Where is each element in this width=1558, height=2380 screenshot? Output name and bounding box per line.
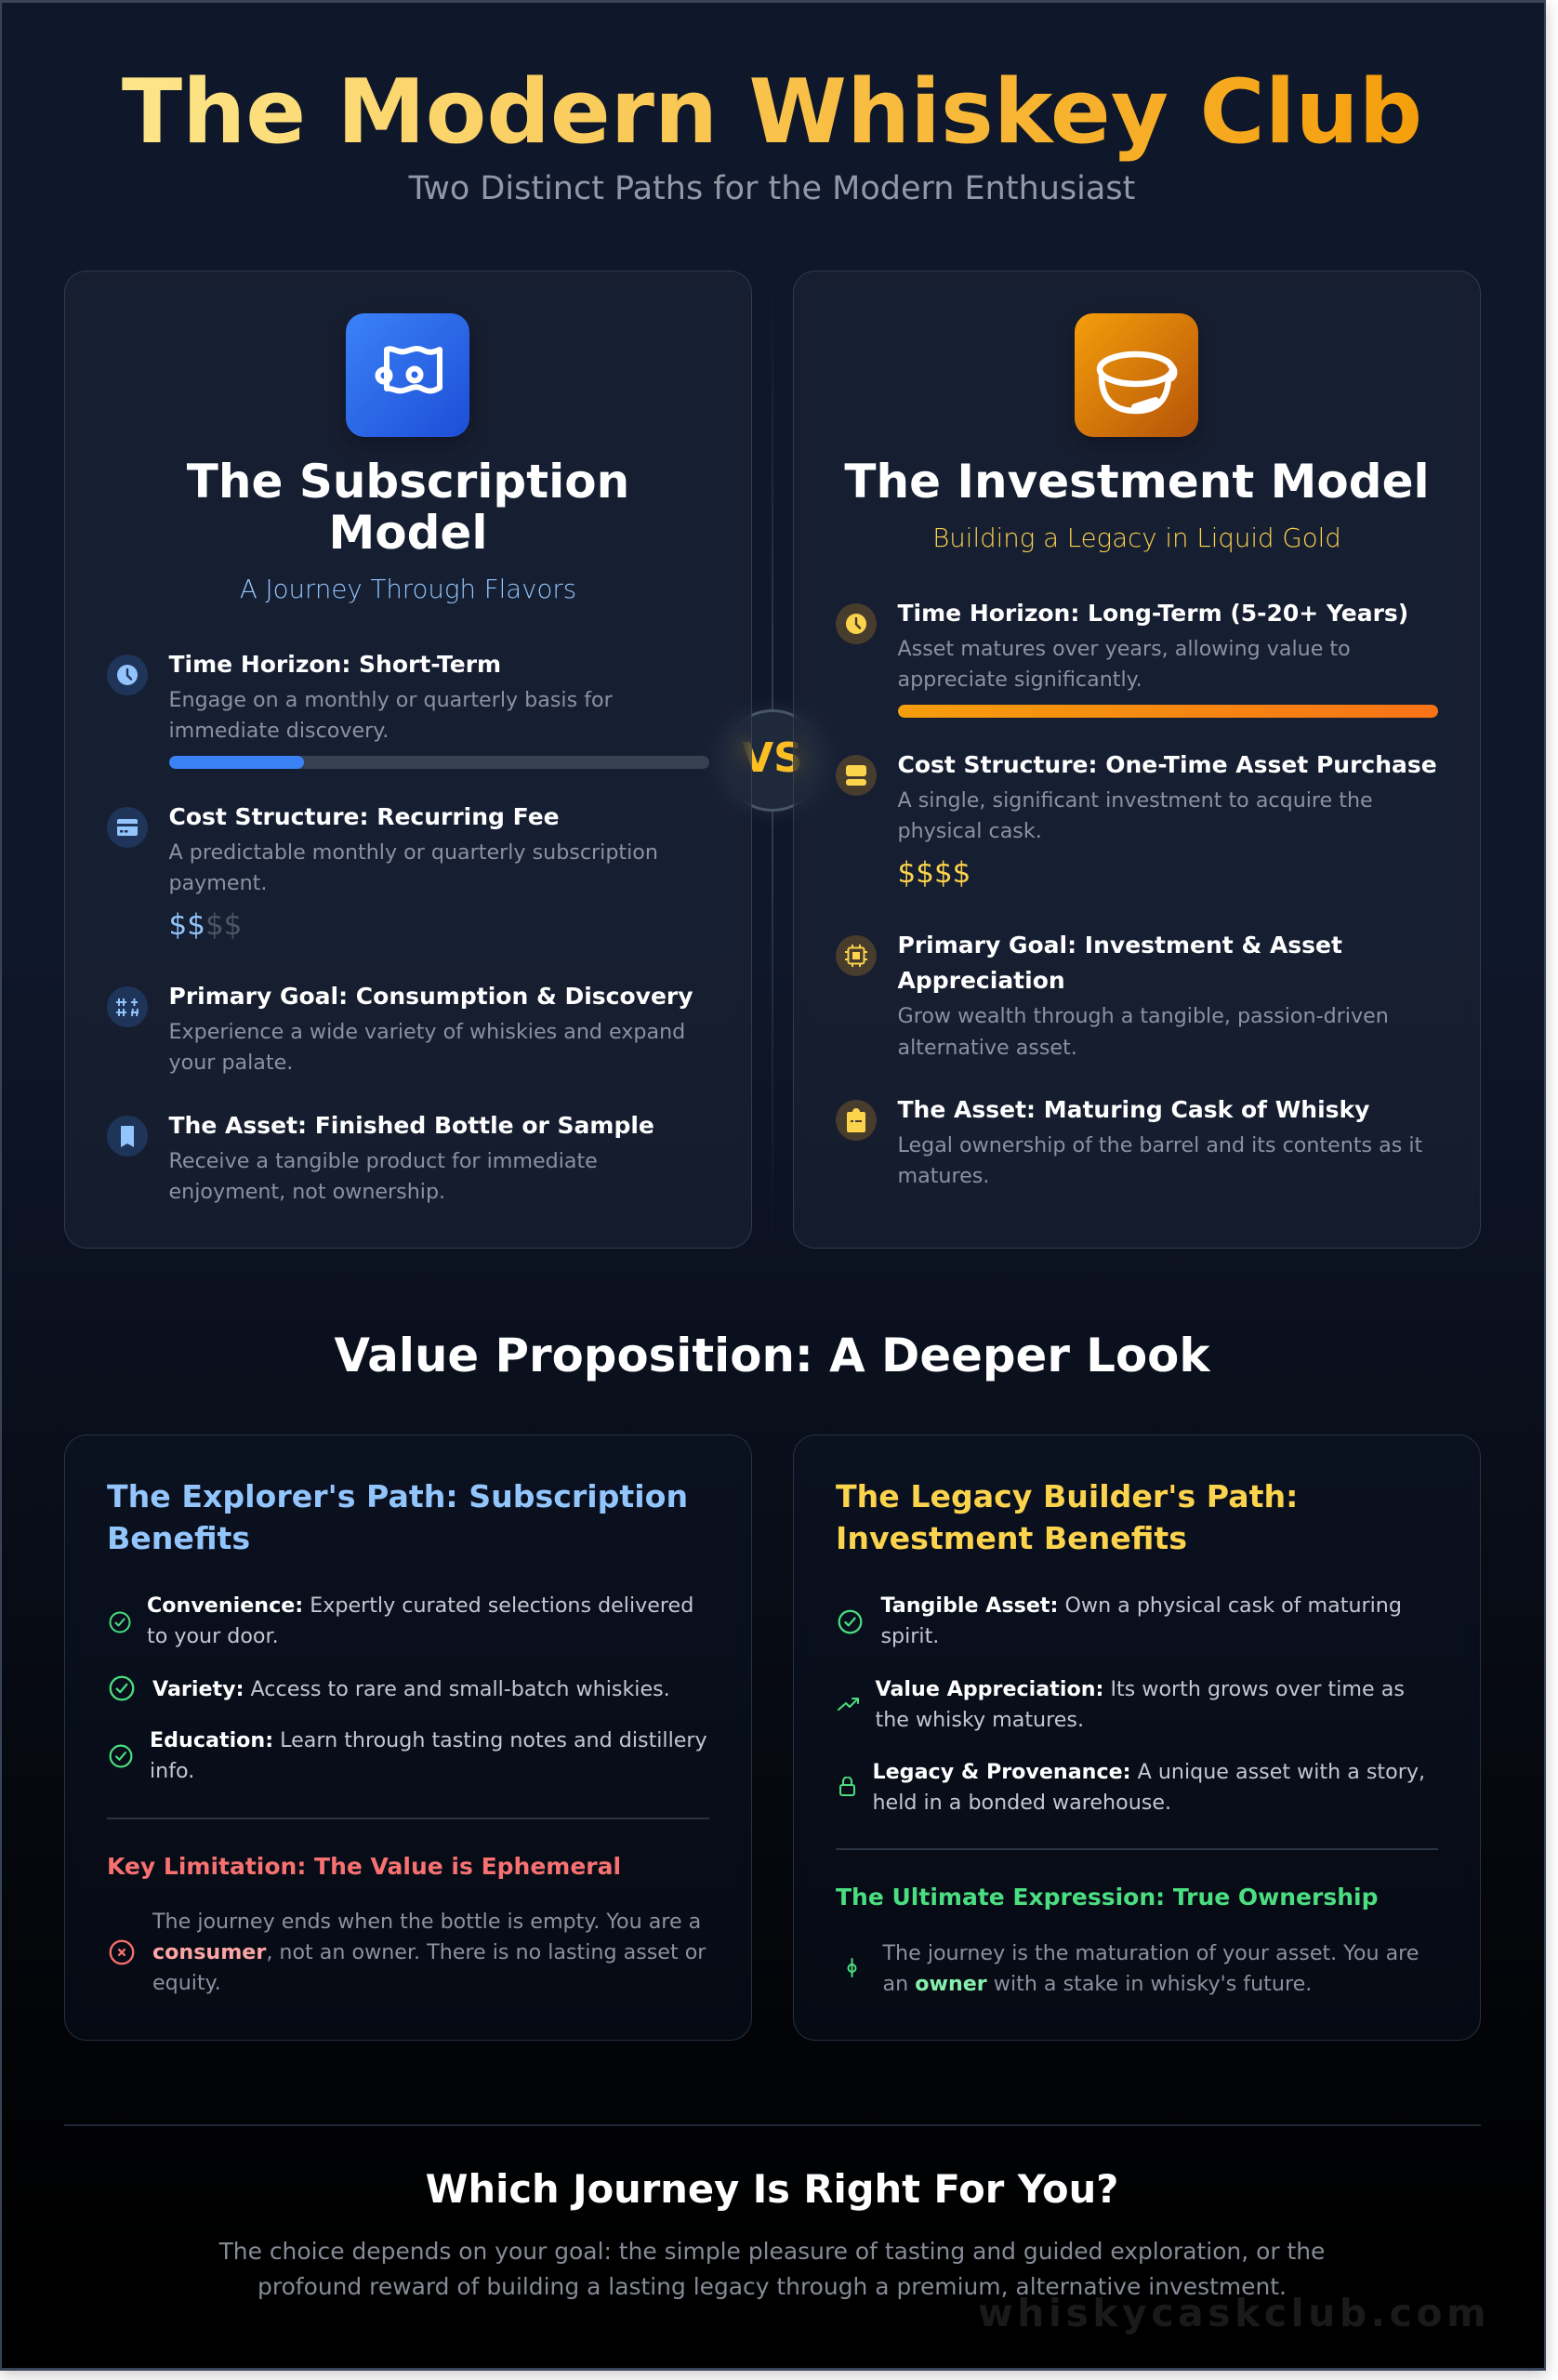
section heading: value proposition: Value Proposition: A Deeper Look: [334, 1329, 1210, 1382]
item: the asset: [107, 1112, 654, 1204]
icon: check circle: [110, 1675, 134, 1701]
icon: stem and circle: [848, 1958, 857, 1977]
icon: clock: [836, 602, 877, 643]
icon: clipboard: [836, 1099, 877, 1140]
icon: chip: [836, 935, 877, 976]
item: the asset: The Asset: Maturing Cask of Whisky: [898, 1095, 1369, 1123]
item: time horizon: appreciate significantly.: [898, 668, 1142, 692]
item: the asset: Legal ownership of the barrel and its contents as it: [898, 1133, 1422, 1157]
benefit: value appreciation: [838, 1677, 1405, 1732]
footer text: The choice depends on your goal: the simple pleasure of tasting and guided exploration, or the: [219, 2238, 1325, 2265]
icon: trending up: [838, 1698, 859, 1711]
icon: ticket: [346, 313, 469, 437]
subtitle: Two Distinct Paths for the Modern Enthusiast: [409, 169, 1135, 206]
heading: subscription model: [187, 454, 629, 560]
item: primary goal: [107, 982, 693, 1075]
callout: ownership: The journey is the maturation of your asset. You are: [883, 1941, 1419, 1965]
icon: check circle: [838, 1610, 863, 1634]
item: primary goal: Experience a wide variety of whiskies and expand: [169, 1020, 685, 1044]
item: time horizon: [107, 651, 709, 769]
callout: ephemeral value: The journey ends when the bottle is empty. You are a: [152, 1910, 701, 1934]
item: primary goal: Primary Goal: Investment & Asset: [898, 932, 1342, 958]
benefit: tangible asset: Tangible Asset: Own a physical cask of maturing: [881, 1593, 1402, 1618]
icon: check circle: [110, 1744, 132, 1768]
callout: ephemeral value: consumer, not an owner. There is no lasting asset or: [152, 1940, 706, 1964]
item: primary goal: alternative asset.: [898, 1036, 1077, 1060]
tagline: A Journey Through Flavors: [240, 574, 576, 604]
icon: cask: [1075, 313, 1198, 437]
heading: Investment Benefits: [836, 1519, 1187, 1556]
item: primary goal: Appreciation: [898, 967, 1065, 994]
price rating: $$$$: [169, 908, 242, 942]
item: primary goal: Grow wealth through a tangible, passion-driven: [898, 1004, 1389, 1028]
heading: investment model: The Investment Model: [844, 454, 1430, 508]
callout: ownership: [848, 1941, 1419, 1996]
benefit: convenience: [110, 1593, 693, 1648]
item: primary goal: your palate.: [169, 1051, 293, 1075]
icon: credit card: [107, 807, 148, 848]
item: the asset: [836, 1095, 1422, 1188]
footer heading: Which Journey Is Right For You?: [426, 2166, 1118, 2212]
item: cost structure: Cost Structure: One-Time Asset Purchase: [898, 751, 1437, 777]
VS badge: VS: [742, 734, 803, 781]
benefit: legacy and provenance: held in a bonded warehouse.: [872, 1791, 1171, 1815]
item: primary goal: Primary Goal: Consumption & Discovery: [169, 982, 693, 1010]
icon: x circle: [110, 1939, 134, 1965]
heading: The Legacy Builder's Path:: [836, 1478, 1298, 1514]
watermark: whiskycaskclub.com: [978, 2291, 1490, 2335]
heading: [107, 1478, 688, 1556]
callout heading: true ownership: The Ultimate Expression: True Ownership: [836, 1884, 1378, 1911]
benefit: education: [110, 1727, 707, 1783]
item: cost structure: [107, 803, 658, 942]
item: time horizon: Time Horizon: Long-Term (5-20+ Years): [898, 599, 1408, 627]
item: time horizon: Engage on a monthly or quarterly basis for: [169, 688, 613, 712]
item: time horizon: [836, 599, 1438, 718]
progress bar: 100%: [898, 705, 1438, 718]
heading: subscription model: The Subscription: [187, 454, 629, 508]
item: the asset: matures.: [898, 1164, 989, 1188]
tagline: Building a Legacy in Liquid Gold: [932, 522, 1341, 552]
panel: explorer's path: [64, 1435, 752, 2041]
benefit: legacy and provenance: [839, 1759, 1425, 1815]
benefit: variety: Variety: Access to rare and small-batch whiskies.: [152, 1677, 670, 1701]
item: cost structure: [836, 751, 1437, 890]
footer divider: [64, 2124, 1481, 2126]
item: primary goal: [836, 932, 1389, 1060]
item: cost structure: physical cask.: [898, 819, 1042, 843]
panel: legacy builder's path: [793, 1435, 1481, 2041]
title: The Modern Whiskey Club: [122, 60, 1422, 164]
panel: investment model: [793, 271, 1481, 1249]
item: cost structure: Cost Structure: Recurring Fee: [169, 803, 560, 829]
benefit: tangible asset: [838, 1593, 1402, 1648]
panel: subscription model: [64, 271, 752, 1249]
item: cost structure: A single, significant investment to acquire the: [898, 788, 1373, 813]
heading: subscription model: Model: [329, 506, 487, 560]
item: the asset: The Asset: Finished Bottle or Sample: [169, 1112, 654, 1138]
VS badge: [721, 709, 824, 812]
icon: bookmark: [107, 1116, 148, 1157]
benefit: value appreciation: the whisky matures.: [876, 1708, 1084, 1732]
price rating: $$$$: [898, 856, 970, 890]
item: time horizon: Asset matures over years, allowing value to: [898, 637, 1351, 661]
icon: check circle: [110, 1612, 130, 1633]
heading: Benefits: [107, 1519, 250, 1556]
heading: [836, 1478, 1298, 1556]
benefit: legacy and provenance: Legacy & Provenance: A unique asset with a story,: [872, 1759, 1425, 1783]
footer text: [219, 2238, 1325, 2300]
benefit: convenience: to your door.: [147, 1624, 279, 1648]
callout: ephemeral value: [110, 1910, 706, 1995]
item: the asset: enjoyment, not ownership.: [169, 1180, 445, 1204]
item: time horizon: immediate discovery.: [169, 719, 389, 743]
icon: lock: [839, 1777, 855, 1796]
benefit: value appreciation: Value Appreciation: Its worth grows over time as: [876, 1677, 1405, 1701]
benefit: education: info.: [150, 1759, 194, 1783]
progress bar: 25%: [169, 756, 709, 769]
callout: ephemeral value: equity.: [152, 1971, 221, 1995]
icon: stacked bars: [836, 755, 877, 796]
callout heading: key limitation: Key Limitation: The Value is Ephemeral: [107, 1853, 621, 1880]
icon: grid marks: [107, 985, 148, 1026]
center divider line: [772, 272, 773, 1250]
item: cost structure: A predictable monthly or quarterly subscription: [169, 840, 658, 865]
footer text: profound reward of building a lasting legacy through a premium, alternative investment.: [257, 2273, 1287, 2300]
callout: ownership: an owner with a stake in whisky's future.: [883, 1972, 1312, 1996]
icon: clock: [107, 654, 148, 695]
item: cost structure: payment.: [169, 871, 267, 895]
benefit: convenience: Convenience: Expertly curated selections delivered: [147, 1593, 693, 1618]
item: the asset: Receive a tangible product for immediate: [169, 1149, 598, 1173]
item: time horizon: Time Horizon: Short-Term: [169, 651, 501, 677]
benefit: tangible asset: spirit.: [881, 1624, 939, 1648]
benefit: education: Education: Learn through tasting notes and distillery: [150, 1727, 707, 1752]
heading: The Explorer's Path: Subscription: [107, 1478, 688, 1514]
